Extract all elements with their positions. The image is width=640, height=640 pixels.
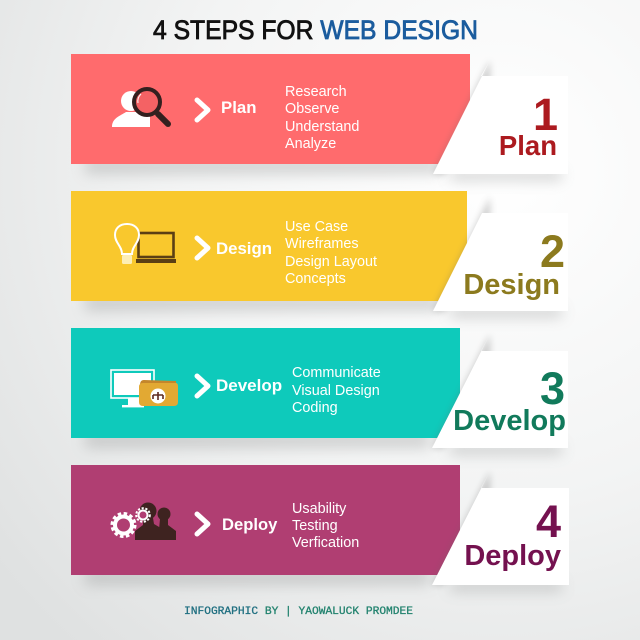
bar 2 [71,191,467,301]
bar 4 [71,465,460,575]
tab shadow bottom 1 [450,170,562,180]
credit footer: INFOGRAPHIC BY | YAOWALUCK PROMDEE [184,606,413,618]
panel: step 2 design [71,191,568,317]
icon: bulb and laptop [115,224,176,264]
number 2: 2 [540,226,565,277]
label: Design: Design [216,239,272,258]
tab label Design: Design [463,269,560,301]
icon: monitor and folder [111,370,178,407]
icon: gears and people [112,502,176,540]
shadow under bar 4 [85,569,430,585]
white tab 4 [432,473,569,585]
tab label Plan: Plan [499,130,557,161]
icon: person with magnifier [112,89,168,127]
number 4: 4 [536,496,561,547]
tab shadow bottom 2 [450,307,562,317]
bar 1 [71,54,470,164]
list: plan tasks: Analyze [285,136,336,152]
tab shadow bottom 4 [450,581,562,591]
arrow [197,100,208,120]
bar 3 [71,328,460,438]
list: design tasks: Wireframes [285,236,359,252]
list: deploy tasks: Usability [292,501,347,517]
white tab 2 [433,199,568,311]
list: deploy tasks: Verfication [292,535,359,551]
list: deploy tasks: Testing [292,518,338,534]
list: develop tasks [292,365,381,416]
panel: step 4 deploy [71,465,569,591]
tab shadow 4 [432,471,490,585]
list: plan tasks: Observe [285,101,339,117]
list: plan tasks: Understand [285,119,359,135]
tab shadow 2 [433,197,490,311]
tab shadow 3 [432,334,490,448]
tab label Develop: Develop [453,405,566,437]
tab shadow 1 [433,60,490,174]
list: develop tasks: Visual Design [292,383,380,399]
list: design tasks: Use Case [285,219,348,235]
shadow under bar 1 [85,158,440,174]
list: design tasks [285,219,377,287]
tab label Deploy: Deploy [464,540,561,572]
list: develop tasks: Communicate [292,365,381,381]
arrow [197,376,208,396]
number 1: 1 [533,89,558,140]
shadow under bar 2 [85,295,440,311]
panel: step 1 plan [71,54,568,180]
list: plan tasks: Research [285,84,347,100]
arrow [197,514,208,534]
title: 4 STEPS FOR WEB DESIGN [153,15,478,45]
panel: step 3 develop [71,328,568,454]
label: Deploy: Deploy [222,515,278,534]
label: Develop: Develop [216,376,282,395]
shadow under bar 3 [85,432,430,448]
tab shadow bottom 3 [450,444,562,454]
list: design tasks: Design Layout [285,254,377,270]
list: deploy tasks [292,501,359,551]
number 3: 3 [540,363,565,414]
arrow [197,238,208,258]
list: design tasks: Concepts [285,271,346,287]
white tab 1 [433,62,568,174]
label: Plan: Plan [221,98,256,117]
list: plan tasks [285,84,359,152]
list: develop tasks: Coding [292,400,338,416]
white tab 3 [432,336,568,448]
